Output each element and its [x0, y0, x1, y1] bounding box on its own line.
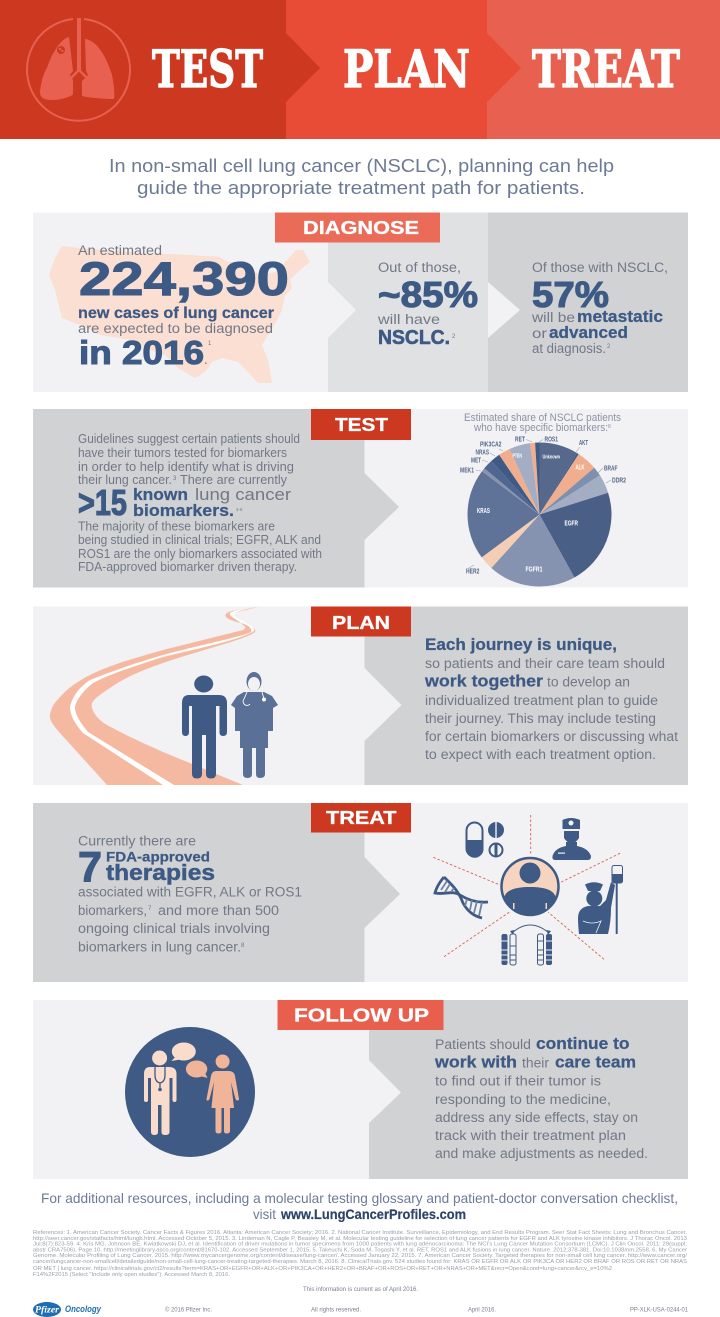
stat: 85 percent [377, 260, 478, 349]
stat: 57 percent: metastatic [577, 308, 663, 326]
footer legal line: April 2016. [468, 1308, 496, 1314]
text block: therapies: therapies [106, 860, 215, 885]
text block: continue to work with care team: address any side effects, stay on [435, 1110, 638, 1125]
icon: doctor and patient conversation [125, 1027, 255, 1157]
text block: each journey is unique: so patients and their care team should [425, 656, 665, 671]
stat: 224,390 new cases: . [204, 352, 208, 367]
text block: each journey is unique: Each journey is unique, [425, 636, 617, 654]
text block: continue to work with care team: care team [555, 1054, 636, 1072]
stat: 57 percent: advanced [549, 324, 628, 342]
section label: follow up [278, 1000, 444, 1030]
chart title: 8 [608, 424, 611, 430]
stat: 57 percent: will be [531, 310, 575, 325]
text block: therapies: 7 [148, 906, 152, 912]
stat: 224,390 new cases: An estimated [78, 243, 162, 258]
stat: 85 percent: ~85% [378, 274, 478, 315]
section label: diagnose [275, 212, 440, 242]
stat: 224,390 new cases: new cases of lung cancer [78, 305, 274, 322]
pie chart: biomarkers: ALK [576, 462, 585, 472]
section label: plan: PLAN [332, 613, 390, 633]
text block: each journey is unique: to expect with each treatment option. [425, 747, 656, 762]
pie chart: biomarkers: DDR2 [612, 476, 626, 484]
stat: 224,390 new cases [78, 243, 289, 371]
references: Jul;8(7):823-59. 4. Kris MG, Johnson BE, Kwiatkowski DJ, et al. Identification of driver mutations in tumor specimens from 1000 patients with lung adenocarcinoma: The NCI's Lung Cancer Mutation Consortium (LCMC). J Clin Oncol. 2011; 29(suppl; [33, 1242, 687, 1248]
pie chart: biomarkers: KRAS [477, 506, 490, 515]
text block: therapies: FDA-approved [106, 848, 210, 864]
pie chart: biomarkers: EGFR [564, 518, 578, 528]
references: References: 1. American Cancer Society. Cancer Facts & Figures 2016. Atlanta: American Cancer Society; 2016. 2. National Cancer Institute. Surveillance, Epidemiology, and End Results Program. Seer Stat Fact Sheets: Lung and Bronchus Cancer. [33, 1230, 687, 1236]
stat: 224,390 new cases: are expected to be diagnosed [78, 321, 273, 336]
text block: guidelines: biomarkers. [133, 502, 234, 520]
text block: therapies: 7 [78, 844, 102, 892]
pie chart: biomarkers: PTEN [512, 454, 522, 460]
stat: 57 percent: 2 [607, 344, 611, 350]
references: Genome. Molecular Profiling of Lung Cancer. 2015. http://www.mycancergenome.org/content/disease/lung-cancer/. Accessed January 22, 2015. 7. American Cancer Society. Targeted therapies for non-small cell lung cancer. http://www.cancer.org/ [33, 1253, 687, 1259]
pie chart: biomarkers: AKT [579, 438, 588, 447]
heading: TEST: TEST [152, 40, 263, 100]
chart title [464, 412, 621, 434]
text block: guidelines: ROS1 are the only biomarkers associated with [78, 547, 322, 561]
section label: treat [311, 803, 411, 832]
panel: test [33, 409, 688, 588]
currency note: This information is current as of April 2016. [303, 1287, 418, 1293]
section label: test [311, 409, 411, 440]
additional resources text: visit [253, 1206, 276, 1222]
chart title: Estimated share of NSCLC patients [464, 412, 621, 424]
text block: each journey is unique: their journey. This may include testing [425, 711, 656, 726]
text block: guidelines: 3 [173, 476, 177, 482]
pie chart: biomarkers: Unknown [542, 454, 560, 460]
panel: plan [33, 606, 688, 785]
intro text [109, 155, 614, 198]
stat: 224,390 new cases: 224,390 [79, 252, 289, 305]
references: OR MET | lung cancer. https://clinicaltrials.gov/ct2/results?term=KRAS+OR+EGFR+OR+ALK+OR+PIK3CA+OR+HER2+OR+BRAF+OR+ROS+OR+RET+OR+NRAS+OR+MET&recr=Open&cond=lung+cancer&rcv_e=10%2 [33, 1266, 612, 1272]
icon: patient [182, 676, 227, 778]
text block: continue to work with care team: and make adjustments as needed. [435, 1146, 648, 1161]
pie chart: biomarkers: NRAS [476, 448, 489, 456]
text block: continue to work with care team: track with their treatment plan [435, 1128, 626, 1143]
text block: guidelines: There are currently [180, 473, 288, 487]
additional resources text [41, 1190, 678, 1222]
section label: diagnose: DIAGNOSE [303, 218, 419, 238]
text block: continue to work with care team [434, 1035, 648, 1161]
icon: DNA helix [435, 877, 488, 918]
text block: continue to work with care team: work with [434, 1054, 517, 1072]
chart title: who have specific biomarkers: [473, 422, 608, 434]
icon: lungs in circle [27, 18, 130, 121]
text block: guidelines: The majority of these biomarkers are [78, 520, 275, 534]
stat: 224,390 new cases: in 2016 [79, 334, 204, 371]
text block: therapies: Currently there are [78, 834, 196, 848]
logo: Pfizer Oncology [33, 1302, 102, 1317]
stat: 57 percent: Of those with NSCLC, [532, 260, 668, 275]
icon: nurse with IV [578, 866, 622, 934]
pie chart: biomarkers: HER2 [466, 566, 480, 576]
text block: therapies: associated with EGFR, ALK or ROS1 [78, 884, 302, 900]
text block: each journey is unique: work together [424, 672, 543, 690]
text block: therapies [78, 834, 302, 954]
references: http://seer.cancer.gov/statfacts/html/lungb.html. Accessed October 5, 2015. 3. Lindeman N, Cagle P, Beasley M, et al. Molecular testing guideline for selection of lung cancer patients for EGFR and ALK tyrosine kinase inhibitors. J Thorac Oncol. 2013 [33, 1236, 687, 1242]
pie chart: biomarkers: MET [471, 456, 481, 464]
stat: 85 percent: Out of those, [378, 260, 461, 275]
references [33, 1230, 687, 1278]
pie chart: biomarkers: PIK3CA2 [480, 440, 502, 448]
text block: each journey is unique: individualized treatment plan to guide [425, 693, 658, 708]
section label: follow up: FOLLOW UP [294, 1006, 429, 1026]
pie chart: biomarkers: BRAF [604, 464, 618, 472]
section label: plan [311, 606, 411, 636]
pie chart: biomarkers: FGFR1 [526, 564, 542, 574]
dashed radiating lines [433, 815, 620, 959]
text block: continue to work with care team: their [522, 1056, 550, 1070]
text block: each journey is unique: to develop an [547, 674, 630, 690]
panel: treat [33, 803, 688, 982]
references: abstr CRA7506). Page 10. http://meetinglibrary.asco.org/content/81670-102. Accessed September 1, 2015. 5. Takeuchi K, Soda M, Togashi Y, et al. RET, ROS1 and ALK fusions in lung cancer. Nature. 2012;378-381. Doi:10.1038/nm.2558. 6. My Cancer [33, 1248, 687, 1254]
icon: chromosomes [501, 925, 552, 965]
icon: patient in circle [502, 858, 558, 915]
panel: follow up [33, 1000, 688, 1179]
icon: surgeon [552, 818, 591, 860]
text block: each journey is unique [424, 636, 678, 762]
text block: therapies: biomarkers in lung cancer. [78, 940, 241, 954]
pie chart: biomarkers: MEK1 [460, 466, 474, 474]
text block: guidelines: >15 [78, 482, 127, 523]
icon: pills [466, 822, 504, 858]
pie chart: biomarkers [460, 434, 626, 587]
footer legal line: © 2016 Pfizer Inc. [165, 1306, 212, 1314]
panel: diagnose [33, 212, 688, 392]
section label: test: TEST [335, 415, 388, 435]
stat: 85 percent: will have [377, 312, 440, 327]
text block: therapies: 8 [241, 943, 245, 949]
pie chart: biomarkers: RET [515, 434, 525, 444]
icon: doctor [231, 672, 278, 778]
text block: therapies: ongoing clinical trials involving [78, 921, 270, 936]
stat: 85 percent: 2 [452, 334, 456, 340]
stat: 224,390 new cases: 1 [208, 341, 212, 347]
additional resources text: www.LungCancerProfiles.com [280, 1206, 466, 1222]
text block: guidelines: being studied in clinical trials; EGFR, ALK and [78, 533, 321, 547]
text block: guidelines: FDA-approved biomarker driven therapy. [78, 560, 297, 574]
text block: continue to work with care team: to find out if their tumor is [435, 1074, 601, 1088]
text block: guidelines [78, 432, 322, 574]
text block: guidelines: Guidelines suggest certain patients should [78, 432, 300, 446]
intro text: guide the appropriate treatment path for patients. [137, 177, 585, 198]
logo: Pfizer Oncology: Oncology [65, 1304, 102, 1314]
text block: guidelines: have their tumors tested for biomarkers [78, 446, 287, 460]
stat: 57 percent: at diagnosis. [532, 341, 606, 356]
intro text: In non-small cell lung cancer (NSCLC), planning can help [109, 155, 614, 176]
text block: guidelines: 4-6 [236, 507, 243, 512]
section label: treat: TREAT [326, 808, 396, 828]
references: cancer/lungcancer-non-smallcell/detailedguide/non-small-cell-lung-cancer-treating-targeted-therapies. March 8, 2016. 8. ClinicalTrials.gov. 524 studies found for: KRAS OR EGFR OR ALK OR PIK3CA OR HER2 OR BRAF OR ROS OR RET OR NRAS [33, 1259, 687, 1265]
text block: guidelines: known [133, 486, 188, 504]
additional resources text: For additional resources, including a molecular testing glossary and patient-doctor conversation checklist, [41, 1190, 678, 1206]
logo: Pfizer Oncology: Pfizer [35, 1304, 60, 1314]
stat: 57 percent: or [532, 326, 548, 341]
text block: guidelines: their lung cancer. [78, 473, 172, 487]
footer legal line: PP-XLK-USA-0244-01 [630, 1308, 689, 1314]
header banner [0, 0, 720, 139]
text block: therapies: and more than 500 [158, 903, 279, 918]
stat: 57 percent: 57% [532, 274, 609, 315]
pie chart: biomarkers: ROS1 [544, 434, 558, 444]
heading: PLAN: PLAN [343, 40, 470, 100]
text block: continue to work with care team: Patients should [435, 1037, 531, 1052]
stat: 57 percent [531, 260, 668, 356]
text block: guidelines: lung cancer [195, 485, 291, 504]
references: F14%2F2015 (Select "Include only open studies"). Accessed March 8, 2016. [33, 1272, 230, 1278]
text block: therapies: biomarkers, [78, 903, 147, 918]
text block: continue to work with care team: responding to the medicine, [435, 1092, 611, 1107]
text block: each journey is unique: for certain biomarkers or discussing what [425, 729, 678, 744]
text block: guidelines: in order to help identify what is driving [78, 460, 294, 474]
winding road [50, 607, 258, 785]
footer legal line: All rights reserved. [311, 1308, 361, 1314]
map of the United States [49, 246, 310, 383]
footer legal line [165, 1306, 689, 1314]
text block: continue to work with care team: continue to [536, 1035, 630, 1053]
stat: 85 percent: NSCLC. [378, 327, 450, 349]
